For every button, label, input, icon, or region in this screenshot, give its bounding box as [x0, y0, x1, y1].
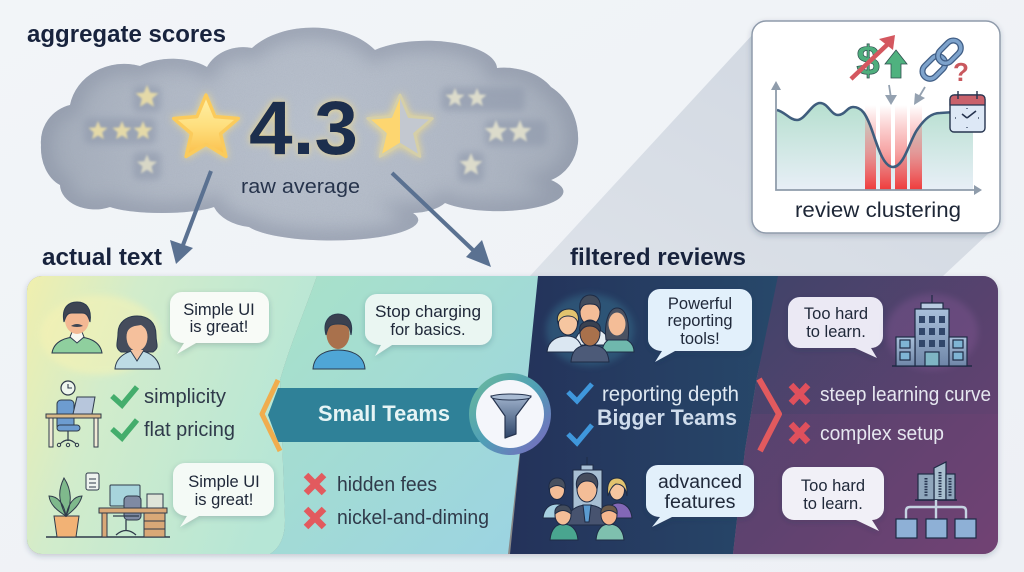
heading: aggregate scores: aggregate scores: [27, 21, 226, 48]
speech bubble: advanced features: advanced: [658, 472, 742, 493]
heading: filtered reviews: filtered reviews: [570, 244, 746, 271]
comparison panel: [27, 276, 998, 554]
icon: small teams arrow banner: [262, 380, 500, 451]
speech bubble: too hard to learn bottom: to learn.: [803, 495, 863, 513]
speech bubble: simple UI is great: [170, 292, 269, 354]
speech bubble: simple UI is great second: [173, 463, 274, 527]
speech bubble: advanced features: features: [664, 492, 736, 513]
icon: broken link and question mark: [919, 37, 969, 87]
icon: broken link and question mark: ?: [953, 57, 969, 87]
icon: red x nickel-and-diming: [306, 509, 324, 527]
panel: bigger teams cons: [733, 276, 998, 554]
big gold star: [174, 95, 238, 157]
cloud of aggregate scores: [30, 20, 590, 245]
label: review clustering: review clustering: [795, 199, 961, 222]
icon: red chevron: [759, 379, 779, 451]
speech bubble: simple UI is great second: Simple UI: [188, 473, 260, 491]
icon: green check simplicity: [112, 387, 137, 405]
speech bubble: too hard to learn top: [788, 297, 883, 358]
label: bigger teams: Bigger Teams: [597, 405, 737, 430]
speech bubble: powerful reporting tools: [648, 289, 752, 362]
heading: actual text: actual text: [42, 244, 162, 271]
speech bubble: powerful reporting tools: reporting: [667, 312, 733, 330]
text: flat pricing: flat pricing: [144, 419, 235, 441]
panel: small teams cons: [270, 276, 540, 554]
half gold star: [368, 95, 432, 157]
icon: red x steep learning curve: [791, 385, 808, 403]
text: nickel-and-diming: nickel-and-diming: [337, 507, 489, 529]
text: hidden fees: hidden fees: [337, 474, 437, 496]
speech bubble: simple UI is great second: is great!: [195, 491, 253, 509]
speech bubble: stop charging for basics: for basics.: [390, 321, 466, 339]
text: complex setup: complex setup: [820, 423, 944, 445]
icon: business team of four: [546, 294, 634, 366]
speech bubble: powerful reporting tools: Powerful: [668, 295, 732, 313]
speech bubble: simple UI is great: is great!: [190, 318, 248, 336]
icon: filter funnel badge: [469, 373, 551, 455]
score 4.3: 4.3: [249, 86, 358, 171]
blurred small ratings, left: [84, 85, 161, 180]
icon: office building: [886, 294, 978, 370]
icon: executive team with tower: [543, 457, 632, 540]
speech bubble: too hard to learn bottom: [782, 467, 884, 531]
label: raw average: raw average: [241, 176, 360, 198]
icon: blue check reporting depth: [568, 384, 592, 401]
icon: red x complex setup: [791, 424, 808, 442]
area chart: [771, 81, 982, 195]
icon: man on dark skin tone: [313, 314, 365, 369]
icon: headquarters with org chart: [896, 462, 976, 538]
icon: calendar clock: [950, 91, 985, 132]
speech bubble: too hard to learn top: Too hard: [804, 305, 868, 323]
icon: green check flat pricing: [112, 420, 137, 438]
icon: crossed dollar and up arrow: [851, 35, 907, 84]
text: simplicity: simplicity: [144, 386, 226, 408]
icon: blue check second: [568, 425, 592, 443]
speech bubble: stop charging for basics: Stop charging: [375, 303, 481, 321]
card: review clustering: [752, 21, 1000, 233]
label: small teams: Small Teams: [318, 401, 450, 426]
text: reporting depth: reporting depth: [602, 383, 739, 406]
text: steep learning curve: steep learning curve: [820, 384, 991, 406]
speech bubble: powerful reporting tools: tools!: [680, 330, 720, 348]
speech bubble: too hard to learn top: to learn.: [806, 323, 866, 341]
small pointer arrows: [885, 85, 925, 105]
light beam from review clustering card: [530, 33, 990, 276]
icon: person at laptop desk: [46, 381, 101, 447]
panel: lower right tint: [744, 414, 828, 488]
speech bubble: too hard to learn bottom: Too hard: [801, 477, 865, 495]
soft glow behind left people: [40, 295, 160, 375]
icon: crossed dollar and up arrow: $: [856, 37, 880, 84]
arrow to actual text: [170, 171, 211, 264]
speech bubble: simple UI is great: Simple UI: [183, 301, 255, 319]
panel: bigger teams pros: [510, 276, 780, 554]
icon: woman with long hair: [115, 316, 160, 369]
icon: red x hidden fees: [306, 475, 324, 493]
icon: man with moustache: [52, 302, 102, 353]
icon: office plant and desk: [46, 473, 170, 537]
blurred small ratings, right: [441, 87, 547, 182]
speech bubble: stop charging for basics: [365, 294, 492, 356]
speech bubble: advanced features: [646, 465, 754, 527]
arrow to filtered reviews: [392, 173, 491, 267]
panel: small teams pros: [27, 276, 317, 554]
